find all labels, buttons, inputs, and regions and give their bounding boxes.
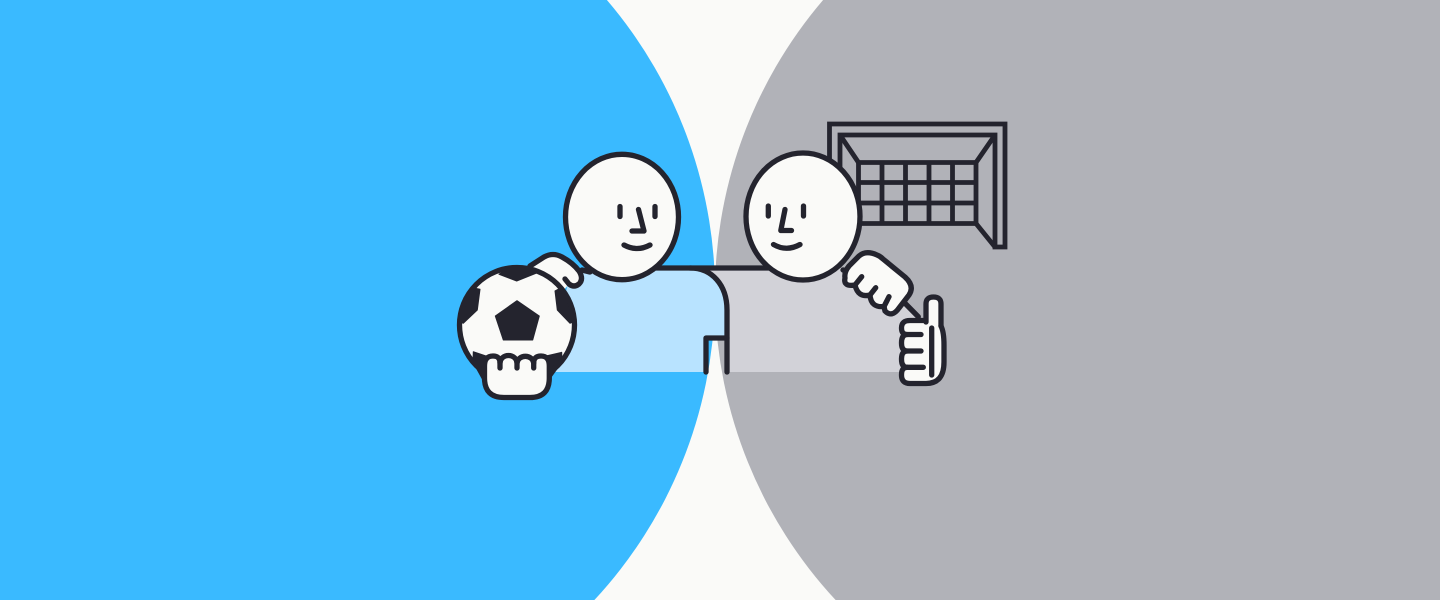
person: right [746, 153, 860, 280]
ball patches [459, 268, 575, 382]
face: left [620, 206, 655, 248]
icon: football [459, 268, 575, 382]
shirt outline [582, 268, 852, 372]
icon: fist holding ball [484, 356, 549, 398]
grey shirt [700, 268, 918, 372]
icon: thumbs up [902, 297, 944, 384]
blue shirt [550, 268, 727, 372]
icon: hand on left shoulder [530, 254, 582, 292]
head: left [566, 154, 678, 280]
icon: football goal [830, 124, 1005, 247]
panel: blue circle [0, 0, 715, 600]
person: left [566, 154, 678, 280]
ball outline [460, 268, 574, 382]
head: right [746, 153, 860, 280]
face: right [768, 206, 804, 248]
icon: hand on right shoulder [845, 253, 911, 314]
icon: arm line [905, 303, 918, 317]
panel: grey circle [715, 0, 1440, 600]
